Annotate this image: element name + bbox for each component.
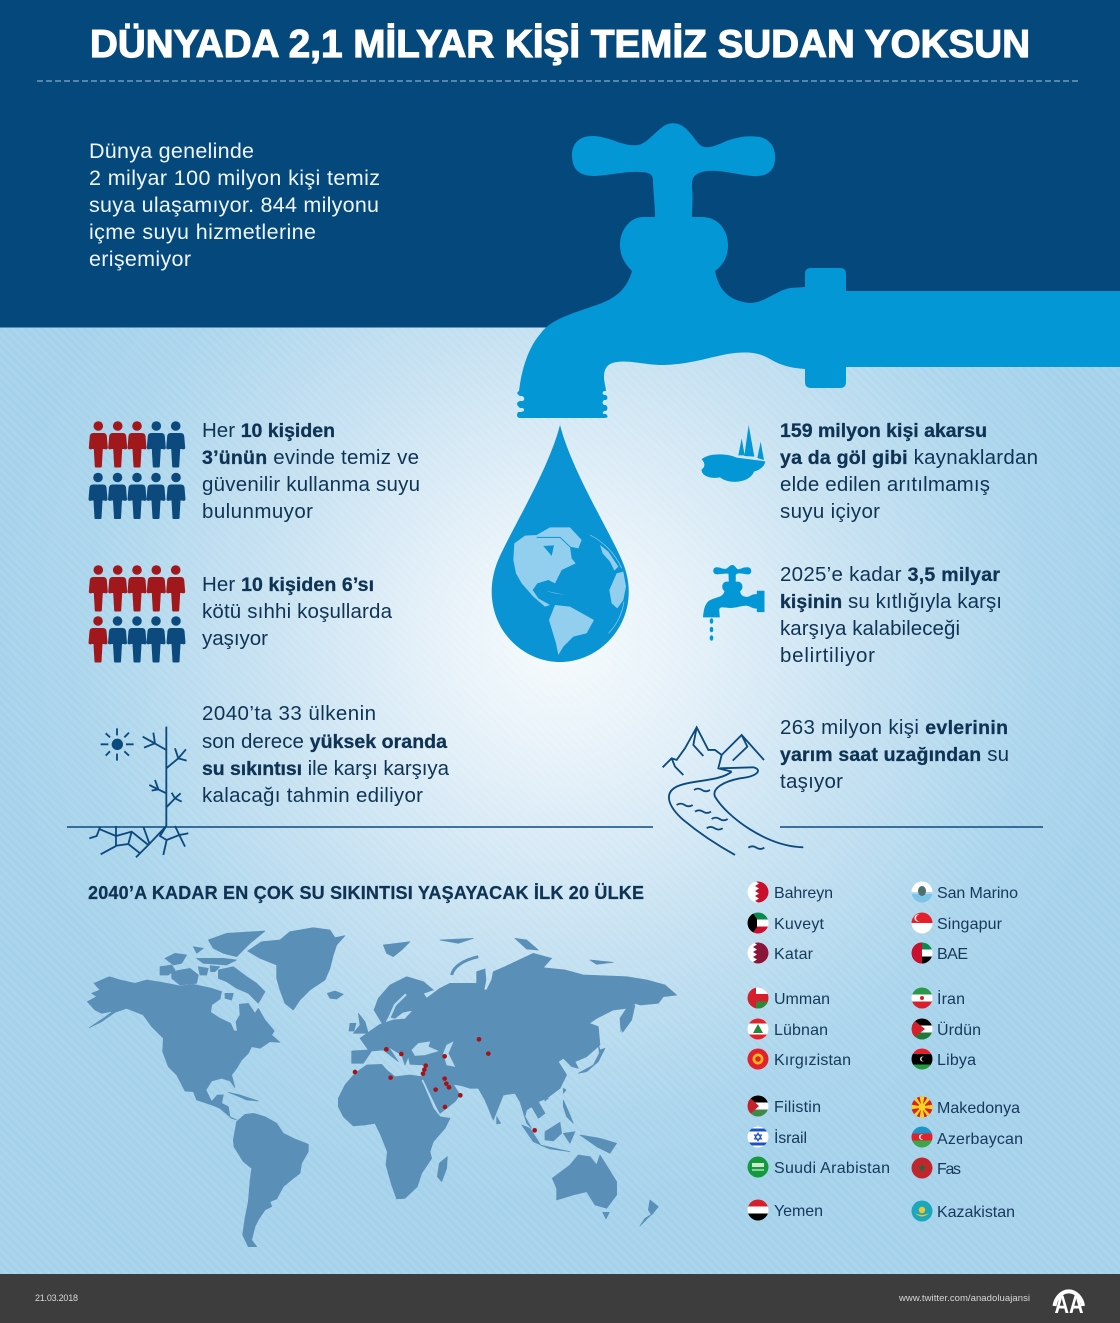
country names: İran bbox=[937, 989, 965, 1008]
country names: Azerbaycan bbox=[937, 1131, 1023, 1148]
text: 2040 bbox=[202, 702, 450, 807]
flag: Makedonya bbox=[911, 1096, 933, 1118]
text: untreated: elde edilen arıtılmamış bbox=[780, 473, 990, 496]
text: untreated bbox=[780, 420, 1038, 523]
text: untreated: suyu içiyor bbox=[780, 500, 880, 523]
flag: İsrail bbox=[747, 1126, 769, 1148]
country names: Umman bbox=[774, 991, 830, 1008]
panel: 2040 water stress bbox=[89, 702, 450, 857]
flag: Fas bbox=[911, 1157, 933, 1179]
panel: 2025 scarcity bbox=[703, 563, 1002, 667]
text: 3 in 10: güvenilir kullanma suyu bbox=[202, 473, 420, 496]
flag: İran bbox=[912, 988, 932, 1008]
header band bbox=[0, 0, 1120, 328]
country names: Kuveyt bbox=[774, 916, 825, 933]
map: Americas and Greenland bbox=[87, 928, 345, 1247]
text: untreated: 159 milyon kişi akarsu bbox=[780, 420, 987, 442]
text: half hour bbox=[780, 716, 1009, 793]
panel: 6 in 10 people bbox=[88, 565, 393, 662]
flag: Libya bbox=[912, 1048, 932, 1070]
icon: big faucet bbox=[517, 123, 1120, 418]
icon: lake bbox=[702, 425, 765, 482]
country names: Ürdün bbox=[937, 1021, 981, 1039]
text: half hour: yarım saat uzağından su bbox=[780, 743, 1009, 766]
flag: Azerbaycan bbox=[912, 1126, 932, 1148]
text: 2040: kalacağı tahmin ediliyor bbox=[202, 784, 423, 807]
flag: Bahreyn bbox=[747, 881, 769, 903]
flag: Kuveyt bbox=[748, 912, 768, 934]
flag: Kazakistan bbox=[911, 1200, 933, 1222]
country names: Yemen bbox=[774, 1203, 823, 1220]
icon: people 6 of 10 bbox=[88, 565, 186, 662]
country names: Kırgızistan bbox=[774, 1052, 851, 1069]
text: half hour: taşıyor bbox=[780, 770, 843, 793]
flag: Singapur bbox=[911, 912, 933, 934]
country list bbox=[747, 881, 1023, 1222]
text: 2025: kişinin su kıtlığıyla karşı bbox=[780, 590, 1002, 613]
text: 2040: 2040’ta 33 ülkenin bbox=[202, 702, 376, 725]
map: Eurasia, Africa and Oceania bbox=[338, 938, 677, 1226]
text: 3 in 10: Her 10 kişiden bbox=[202, 419, 335, 442]
map: seas bbox=[388, 994, 455, 1113]
ground lines bbox=[67, 826, 1043, 828]
text: untreated: ya da göl gibi kaynaklardan bbox=[780, 446, 1038, 469]
text: 2025: belirtiliyor bbox=[780, 644, 875, 667]
country names: Makedonya bbox=[937, 1100, 1020, 1117]
flag: Umman bbox=[748, 988, 768, 1008]
flag: Ürdün bbox=[912, 1018, 932, 1040]
date: 21.03.2018 bbox=[35, 1293, 78, 1303]
country names: Fas bbox=[937, 1161, 961, 1178]
icon: dry tree and sun bbox=[89, 727, 188, 857]
flag: Yemen bbox=[748, 1200, 768, 1220]
text: 2025: karşıya kalabileceği bbox=[780, 617, 960, 640]
text: 2025 bbox=[780, 563, 1002, 667]
text: 2025: 2025’e kadar 3,5 milyar bbox=[780, 563, 1000, 586]
text: 6 in 10: yaşıyor bbox=[202, 627, 268, 650]
country names: Katar bbox=[774, 946, 814, 963]
text: 2040: su sıkıntısı ile karşı karşıya bbox=[202, 757, 450, 780]
panel: half hour carrying bbox=[663, 716, 1009, 855]
twitter url: www.twitter.com/anadoluajansi bbox=[898, 1293, 1030, 1304]
flag: Filistin bbox=[748, 1096, 768, 1116]
icon: mountains and river bbox=[663, 727, 803, 855]
country names: Bahreyn bbox=[774, 885, 833, 902]
icon: small faucet bbox=[703, 565, 765, 641]
text: 3 in 10 bbox=[202, 419, 420, 523]
country names: Libya bbox=[937, 1052, 976, 1069]
country names: BAE bbox=[937, 946, 968, 963]
logo: AA: AA bbox=[1054, 1291, 1084, 1319]
text: 6 in 10 bbox=[202, 573, 393, 650]
title: DÜNYADA 2,1 MİLYAR KİŞİ TEMİZ SUDAN YOKSUN bbox=[90, 23, 1030, 66]
footer bar bbox=[0, 1274, 1120, 1323]
text: 6 in 10: kötü sıhhi koşullarda bbox=[202, 600, 393, 623]
text: 3 in 10: 3’ünün evinde temiz ve bbox=[202, 446, 419, 469]
text: 6 in 10: Her 10 kişiden 6’sı bbox=[202, 573, 374, 596]
icon: people 3 of 10 bbox=[88, 421, 186, 519]
intro text: erişemiyor bbox=[89, 247, 191, 271]
panel: 3 in 10 people bbox=[88, 419, 420, 523]
flag: Katar bbox=[747, 942, 769, 964]
intro text bbox=[89, 139, 380, 271]
heading: top 20 countries: 2040’A KADAR EN ÇOK SU SIKINTISI YAŞAYACAK İLK 20 ÜLKE bbox=[88, 883, 644, 903]
panel: untreated water bbox=[702, 420, 1038, 523]
icon: water drop with globe bbox=[492, 425, 629, 662]
flag: Suudi Arabistan bbox=[747, 1156, 769, 1178]
text: 3 in 10: bulunmuyor bbox=[202, 500, 313, 523]
country names bbox=[774, 885, 1023, 1221]
text: half hour: 263 milyon kişi evlerinin bbox=[780, 716, 1008, 739]
intro text: içme suyu hizmetlerine bbox=[89, 220, 316, 244]
intro text: suya ulaşamıyor. 844 milyonu bbox=[89, 193, 379, 217]
text: 2040: son derece yüksek oranda bbox=[202, 730, 447, 753]
country names: İsrail bbox=[774, 1128, 807, 1147]
country names: San Marino bbox=[937, 885, 1018, 902]
flag: Lübnan bbox=[748, 1018, 768, 1040]
map: red dots bbox=[353, 1037, 537, 1133]
world map bbox=[87, 928, 677, 1247]
flag: Kırgızistan bbox=[747, 1048, 769, 1070]
country names: Lübnan bbox=[774, 1022, 828, 1039]
intro text: Dünya genelinde bbox=[89, 139, 254, 163]
flag: San Marino bbox=[912, 882, 932, 902]
flag: BAE bbox=[912, 942, 932, 964]
country names: Singapur bbox=[937, 916, 1003, 933]
intro text: 2 milyar 100 milyon kişi temiz bbox=[89, 166, 380, 190]
country names: Suudi Arabistan bbox=[774, 1160, 890, 1177]
country names: Kazakistan bbox=[937, 1204, 1015, 1221]
country names: Filistin bbox=[774, 1099, 821, 1116]
